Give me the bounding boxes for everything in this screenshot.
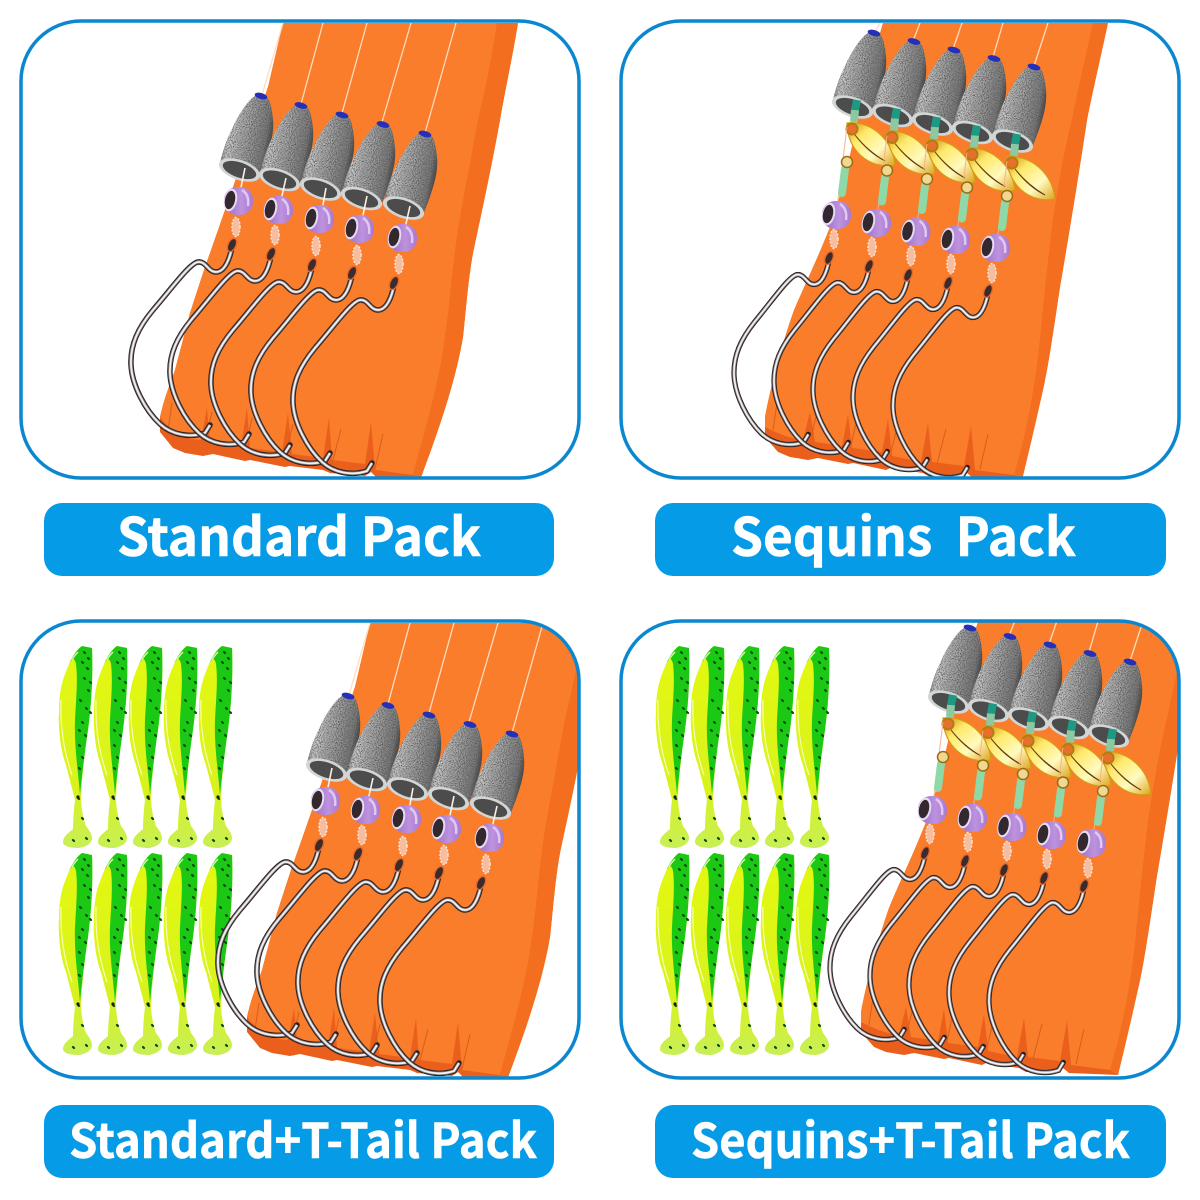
panel: standard plus t-tail pack: [21, 621, 605, 1080]
product: foam board with five bullet-weight hooks: [218, 623, 605, 1080]
label: Standard+T-Tail Pack: Standard+T-Tail Pack: [69, 1102, 537, 1172]
product: foam board with five bullet-weight hooks: [131, 23, 518, 480]
product: foam board with five spinner-blade hooks: [734, 23, 1108, 480]
panel: sequins plus t-tail pack: [621, 618, 1200, 1078]
label: Sequins Pack: [655, 496, 1166, 576]
panel: standard pack: [21, 21, 579, 480]
product: ten green t-tail soft lures: [656, 646, 829, 1055]
product: foam board with five spinner-blade hooks: [830, 618, 1200, 1075]
label: Sequins+T-Tail Pack: Sequins+T-Tail Pack: [691, 1102, 1130, 1172]
product: ten green t-tail soft lures: [59, 646, 232, 1055]
label: Standard Pack: Standard Pack: [117, 496, 481, 572]
panel: sequins pack: [621, 21, 1179, 480]
label: Sequins Pack: Sequins Pack: [731, 496, 1076, 572]
